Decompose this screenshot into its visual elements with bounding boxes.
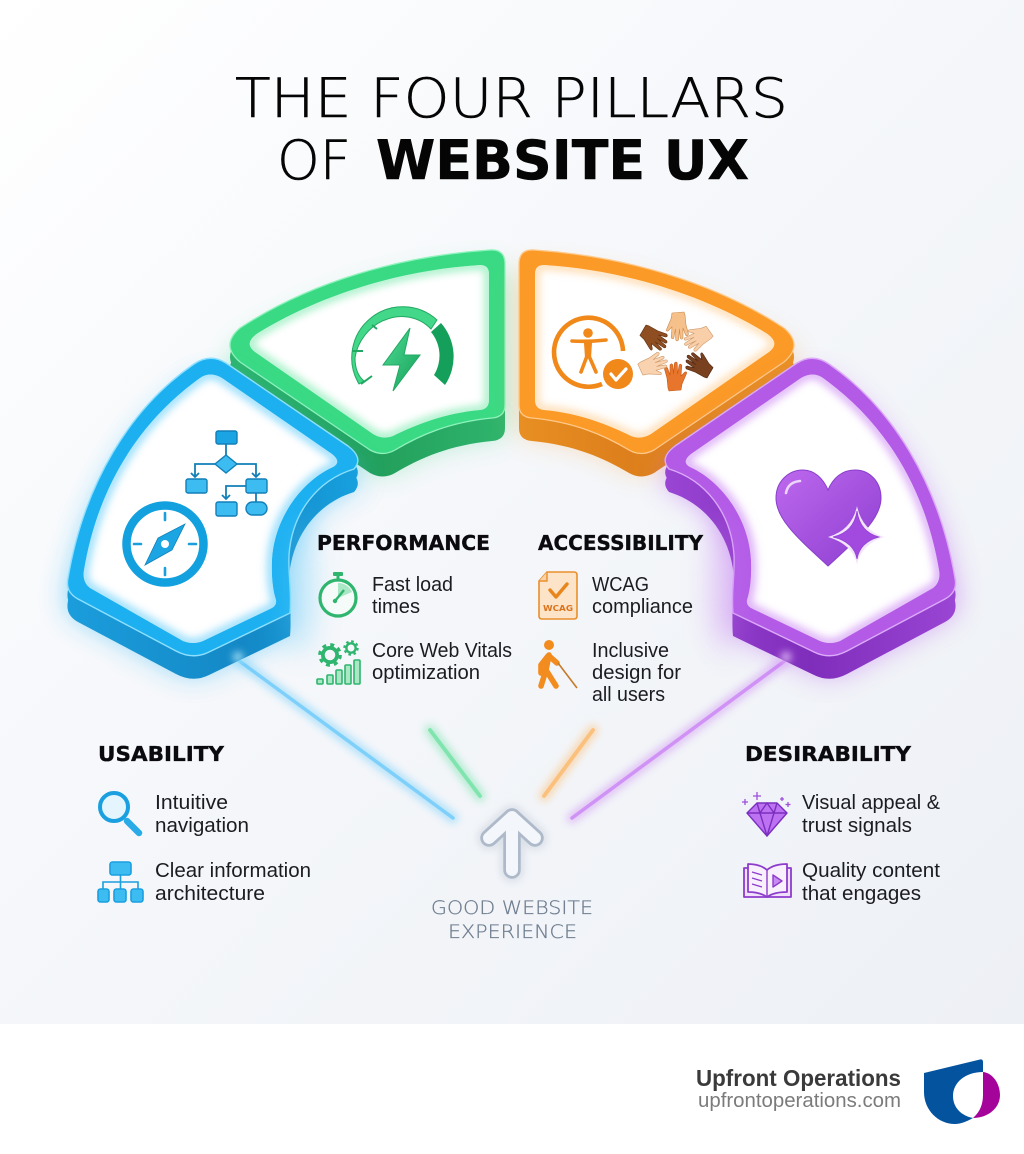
text: inclusive design: Inclusive [592, 640, 669, 662]
text: clear information architecture: Clear information [155, 860, 311, 882]
text: WCAG compliance: compliance [592, 596, 693, 618]
text: intuitive navigation: Intuitive [155, 792, 228, 814]
icon: WCAG document: WCAG [543, 604, 573, 613]
text block: usability: USABILITY [98, 742, 225, 766]
title [235, 67, 788, 192]
text: quality content: Quality content [802, 860, 940, 882]
arrow: good experience [489, 817, 535, 870]
icon: magnifier [100, 793, 139, 833]
text: clear information architecture [155, 860, 311, 905]
icon: heart with sparkle [776, 470, 884, 566]
footer brand text: Upfront Operations [696, 1065, 901, 1091]
text: fast load times: Fast load [372, 574, 453, 596]
text: core web vitals: Core Web Vitals [372, 640, 512, 662]
text block: desirability: DESIRABILITY [745, 742, 912, 766]
text block: performance [317, 531, 512, 684]
arrow caption: EXPERIENCE [448, 921, 577, 943]
footer brand text [696, 1065, 901, 1112]
panel: accessibility (orange) [519, 250, 794, 476]
text block: desirability [742, 742, 941, 905]
title: OF [277, 129, 351, 192]
icon: speedometer with bolt [352, 307, 454, 391]
text: WCAG compliance: WCAG [592, 574, 649, 596]
icon: WCAG document [539, 572, 577, 619]
text: clear information architecture: architecture [155, 883, 265, 905]
text: inclusive design [592, 640, 681, 706]
icon: hierarchy [98, 862, 143, 902]
text block: performance: PERFORMANCE [317, 531, 490, 555]
text: intuitive navigation [155, 792, 249, 837]
text block: usability [98, 742, 311, 905]
icon: open book [744, 864, 791, 897]
title: THE FOUR PILLARS [235, 67, 788, 130]
text: visual appeal [802, 792, 941, 837]
text: fast load times: times [372, 596, 420, 618]
text: intuitive navigation: navigation [155, 815, 249, 837]
icon: flowchart [186, 431, 267, 516]
footer band [0, 1024, 1024, 1154]
panel: desirability (purple) [665, 358, 956, 679]
text: visual appeal: Visual appeal & [802, 792, 941, 814]
text: core web vitals: optimization [372, 662, 480, 684]
text: quality content [802, 860, 940, 905]
icon: diamond [742, 792, 790, 836]
icon: stopwatch [320, 572, 356, 616]
connector lines to arrow [238, 660, 786, 818]
footer brand text: upfrontoperations.com [698, 1090, 901, 1112]
panel: performance (green) [230, 250, 505, 476]
text block: accessibility [538, 531, 704, 706]
arrow caption: GOOD WEBSITE [431, 897, 593, 919]
text: quality content: that engages [802, 883, 921, 905]
text: core web vitals [372, 640, 512, 684]
logo [924, 1059, 1000, 1124]
panel: usability (blue) [67, 358, 358, 679]
title: WEBSITE UX [376, 129, 749, 192]
icon: accessibility person with check [554, 318, 633, 389]
text: visual appeal: trust signals [802, 815, 912, 837]
text: inclusive design: all users [592, 684, 665, 706]
icon: compass [126, 506, 204, 582]
text: inclusive design: design for [592, 662, 681, 684]
icon: circle of hands [636, 312, 717, 391]
text: fast load times [372, 574, 453, 618]
center and node glows [233, 515, 791, 662]
arrow caption [431, 897, 593, 943]
icon: gears and bars [317, 641, 360, 684]
text: WCAG compliance [592, 574, 693, 618]
text block: accessibility: ACCESSIBILITY [538, 531, 704, 555]
icon: person with cane [541, 640, 577, 688]
